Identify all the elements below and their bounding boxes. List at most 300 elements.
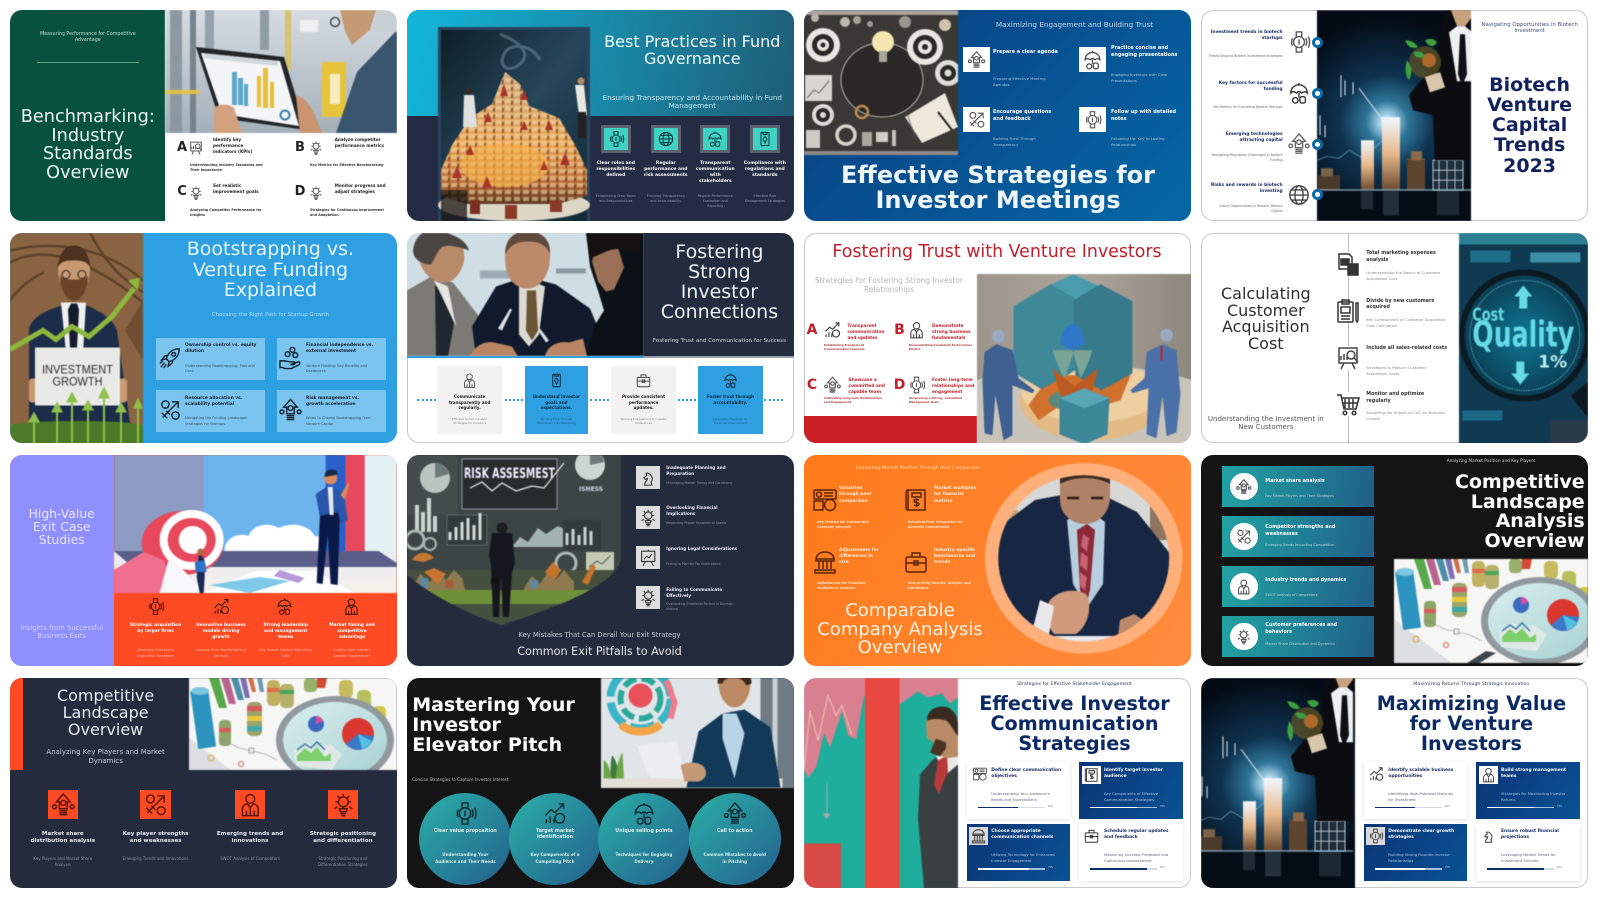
column 1 heading: responsibilities	[596, 167, 635, 172]
card 2	[1476, 762, 1580, 819]
illustration: risk assessment shield: ISHESS	[579, 486, 603, 493]
subtitle: Strategies for Effective Stakeholder Engagement	[1017, 682, 1132, 687]
title: Investor	[681, 281, 758, 303]
icon tile: presentations	[1079, 47, 1106, 72]
subtitle: Business Exits	[37, 632, 86, 640]
title: Bootstrapping vs.	[187, 238, 354, 260]
title: Fostering	[675, 241, 763, 263]
item 2 heading: Divide by new customers	[1366, 299, 1434, 304]
card 3 heading	[1388, 829, 1454, 841]
item 3 heading: Include all sales-related costs	[1366, 346, 1447, 351]
oval 2 heading: Target market	[536, 829, 574, 834]
card 2 description: Transparency and Reporting	[537, 421, 576, 425]
title: Venture Funding	[193, 259, 348, 281]
photo: businessman before market chart	[804, 678, 958, 888]
oval 4 description: Common Mistakes to Avoid	[703, 852, 766, 857]
card 4 description: Leveraging Market Trends for	[1501, 853, 1556, 857]
card 2 description: Communication Strategies	[1104, 798, 1154, 802]
item D heading: Monitor progress and	[335, 183, 386, 188]
subtitle	[815, 276, 963, 294]
column 3 description: Evaluation and	[703, 199, 728, 203]
item 3 description: Multiples in Analysis	[817, 586, 855, 590]
card 2 progress bar	[1487, 807, 1554, 808]
follow up description: Following Up: Key to Lasting	[1111, 136, 1165, 141]
card 3 heading	[622, 394, 665, 411]
column 1 description: Key Players and Market Share	[33, 856, 92, 861]
column 2 heading: and weaknesses	[130, 838, 181, 844]
subtitle: Fostering Trust and Communication for Success	[653, 338, 786, 344]
card: independence	[276, 338, 386, 380]
card 4	[1476, 824, 1580, 881]
item A description: Establishing Transparent	[824, 343, 864, 347]
subtitle: Ensuring Transparency and Accountability in Fund	[603, 92, 782, 102]
card: resources	[156, 390, 265, 432]
card 2	[1222, 516, 1374, 557]
item 2 heading: acquired	[1366, 305, 1390, 310]
column 1 description	[137, 648, 174, 659]
title: Fostering Trust with Venture Investors	[832, 242, 1162, 262]
item D description: Strategies for Continuous Improvement	[310, 208, 384, 212]
independence heading: external investment	[306, 349, 356, 354]
timeline dot 3	[1312, 138, 1322, 150]
item 1 heading: startups	[1262, 36, 1283, 41]
photo: man holding investment growth sign: GROWTH	[52, 376, 102, 388]
subtitle	[20, 624, 103, 640]
questions description	[993, 136, 1036, 147]
ownership heading: Ownership control vs. equity	[185, 343, 256, 348]
item 1 description: Trends Shaping Biotech Investment Strategies	[1209, 54, 1283, 58]
item 4 description	[1219, 204, 1283, 214]
item C heading	[213, 183, 259, 194]
card 1 heading: Communicate	[454, 394, 485, 399]
oval 1 description: Understanding Your	[442, 852, 488, 857]
card 1 description: Understanding Your Audience's	[991, 792, 1050, 796]
panel: Bootstrapping slide	[10, 232, 397, 443]
panel: Investor Communication slide	[804, 678, 1191, 888]
card 1 percent: 60%	[1048, 804, 1053, 808]
item 4 heading	[666, 587, 722, 599]
dotted connector 4	[678, 399, 696, 401]
photo: three men in discussion	[407, 232, 644, 356]
column 3 heading: and management	[264, 629, 307, 634]
card 1 heading	[1388, 768, 1453, 780]
item 1 heading	[1366, 251, 1436, 265]
card 3 percent: 75%	[1445, 866, 1450, 869]
photo: man holding investment growth sign	[10, 232, 143, 444]
letter D: D	[894, 377, 905, 393]
subtitle: Measuring Performance for Competitive	[40, 32, 136, 37]
icon: watch	[1290, 31, 1310, 53]
card 1 description: Key Market Players and Their Strategies	[1265, 494, 1334, 498]
item 1 heading: Investment trends in biotech	[1211, 30, 1283, 35]
column 3 description	[259, 648, 312, 659]
photo: magnifier over cost and quality: 1%	[1538, 352, 1567, 372]
dotted connector 5	[764, 399, 783, 401]
subtitle: Concise Strategies to Capture Investor Interest	[412, 777, 508, 782]
title: Elevator Pitch	[412, 734, 562, 756]
title	[29, 507, 95, 547]
column 1 description: Establishing Clear Roles	[596, 194, 636, 198]
icon tile 1	[48, 790, 78, 819]
panel: Exit Pitfalls slide	[407, 455, 794, 666]
card 2 description	[1104, 791, 1158, 803]
oval 4 heading: Call to action	[717, 829, 753, 834]
item 3 description	[1211, 152, 1283, 162]
item 3 description: Strategies to Reduce Customer	[1366, 365, 1426, 370]
panel: Competitive Landscape Analysis slide	[1201, 455, 1588, 666]
title: Company Analysis	[817, 619, 983, 640]
item 3 heading: attracting capital	[1240, 138, 1283, 143]
title: Standards	[43, 144, 133, 164]
item 2 heading	[1366, 299, 1434, 312]
item 4 description	[908, 581, 971, 591]
card 3 description: Relationships	[1388, 859, 1413, 863]
item 2 heading	[934, 486, 976, 505]
card 4 heading	[1265, 622, 1337, 636]
item 4 heading: regularly	[1366, 399, 1391, 404]
follow up heading: notes	[1111, 116, 1127, 122]
column 3 heading	[264, 623, 308, 641]
red base strip	[804, 416, 977, 444]
column 4 heading	[310, 830, 376, 846]
item D description: and Adaptation	[310, 212, 339, 216]
panel: Elevator Pitch slide	[407, 678, 794, 888]
icon tile 4	[636, 586, 660, 609]
icon badge 4	[1230, 623, 1258, 650]
column 3 description: Reporting	[707, 204, 723, 208]
card 1 heading: Market share analysis	[1265, 478, 1325, 484]
title: Strategies	[1018, 732, 1131, 755]
column 2 heading: risk assessments	[644, 173, 688, 178]
item 4 heading: Failing to Communicate	[666, 587, 722, 592]
oval 2 description: Key Components of a	[530, 852, 580, 857]
oval 3 description: Delivery	[634, 859, 653, 864]
card 2 heading: Build strong management	[1501, 768, 1566, 773]
card 4 heading	[1501, 829, 1559, 841]
column 4 description: Strategic Positioning and	[318, 856, 367, 861]
subtitle: Analyzing Key Players and Market	[46, 748, 165, 756]
card 1 heading: regularly.	[459, 405, 481, 410]
item 3 description: Acquisition Costs	[1366, 371, 1399, 376]
column 3 heading: stakeholders	[699, 179, 732, 184]
icon: house arrow	[824, 376, 841, 394]
risk description: When to Choose Bootstrapping Over	[306, 416, 371, 420]
oval 1 description: Audience and Their Needs	[435, 859, 496, 864]
timeline dot 4	[1312, 189, 1322, 200]
title: Competitive	[57, 686, 154, 705]
column 2 description: Emerging Trends and Innovations	[123, 856, 188, 861]
icon tile 1	[636, 466, 660, 489]
presentations heading: engaging presentations	[1111, 52, 1177, 58]
blue accent strip	[407, 356, 644, 358]
item 2 description	[1366, 317, 1446, 329]
photo: man with laptop and marketing wheel	[600, 678, 794, 788]
item 2 heading: Overlooking Financial	[666, 505, 718, 510]
card 3 heading: communication channels	[991, 835, 1053, 840]
item 1 description: Acquisition Cost	[1366, 276, 1397, 281]
presentations description: Engaging Investors with Clear	[1111, 72, 1168, 77]
icon tile: clipboard	[750, 125, 780, 153]
item 4 description	[1366, 410, 1445, 423]
subtitle: Relationships	[864, 284, 914, 294]
card 1 description	[452, 417, 487, 426]
ownership heading	[185, 343, 256, 356]
subtitle: Analyzing Market Position and Key Players	[1447, 458, 1535, 462]
icon: coins and gears	[813, 488, 837, 512]
item C description: Insights	[190, 212, 205, 216]
column 4 description	[745, 194, 785, 203]
title: 2023	[1503, 155, 1556, 177]
title: Trends	[1494, 134, 1565, 156]
item 1 heading	[666, 465, 726, 478]
card 1 description	[991, 791, 1050, 803]
title: Venture	[1487, 94, 1572, 116]
risk heading: Risk management vs.	[306, 396, 359, 401]
subtitle: Investment	[1514, 28, 1545, 34]
item 3 heading	[839, 548, 879, 566]
item C description: Cultivating Long-term Relationships	[824, 396, 882, 400]
item C heading: Set realistic	[213, 183, 241, 188]
column 3 heading	[217, 830, 283, 846]
illustration: target and businessman	[114, 455, 397, 593]
icon: dollar book	[904, 488, 928, 512]
title: Landscape	[63, 703, 149, 722]
card 1	[1222, 466, 1374, 507]
item 3 description	[817, 581, 866, 591]
column 2 description: Lessons from Top-Performing	[196, 648, 246, 652]
column 4 description: Differentiation Strategies	[318, 862, 368, 867]
card: ownership	[156, 338, 265, 380]
card 1 progress bar	[1375, 807, 1442, 808]
item D description	[909, 397, 962, 405]
icon: watch	[908, 376, 925, 394]
card 2	[1079, 762, 1183, 819]
column 2 description: Ensuring Transparency	[647, 194, 685, 198]
subtitle: Advantage	[75, 38, 101, 43]
oval 3 description: Techniques for Engaging	[615, 852, 672, 857]
item 4 heading: Industry-specific	[934, 548, 975, 552]
resources heading: Resource allocation vs.	[185, 396, 242, 401]
title: Governance	[644, 49, 741, 68]
title	[1455, 473, 1585, 552]
icon tile: follow up	[1079, 107, 1106, 132]
title	[841, 161, 1155, 214]
risk heading	[306, 396, 359, 408]
column 2 heading	[644, 160, 688, 178]
card 4 heading	[1104, 829, 1168, 841]
column 3 description	[698, 194, 733, 208]
item D heading: relationships and	[932, 384, 974, 389]
item A letter: A	[177, 140, 187, 155]
icon: shopping cart	[1336, 392, 1360, 416]
item 2 heading	[1219, 80, 1283, 92]
column 2 description: Startups	[214, 654, 228, 658]
title: Comparable	[845, 600, 955, 621]
item B description	[909, 344, 972, 351]
card 4	[698, 366, 763, 434]
icon: coins and gears	[973, 766, 987, 782]
card 1 heading: transparently and	[449, 400, 490, 404]
card 4 description	[1104, 852, 1168, 864]
questions heading: Encourage questions	[993, 109, 1051, 115]
column 4 heading	[329, 623, 375, 641]
column 4 heading: and differentiation	[313, 838, 373, 844]
column 4 description: Effective Risk	[753, 194, 776, 198]
photo: man holding investment growth sign: INVESTMENT	[42, 364, 113, 376]
icon: hand with coins	[279, 345, 302, 371]
icon tile: person	[1479, 766, 1498, 784]
oval 3 heading: Unique selling points	[615, 829, 673, 834]
vertical timeline line	[1348, 232, 1349, 444]
column 1 heading: distribution analysis	[30, 838, 95, 844]
item D letter: D	[295, 184, 305, 199]
card 1 description: Needs and Expectations	[991, 798, 1037, 802]
item 4 heading: trends	[934, 560, 950, 565]
panel: Benchmarking slide	[10, 10, 397, 220]
column 4 heading: standards	[752, 173, 778, 178]
card 2 percent: 70%	[1160, 804, 1165, 808]
ownership description	[185, 364, 255, 374]
section heading: Maximizing Engagement and Building Trust	[996, 20, 1153, 29]
oval 4 description	[703, 852, 766, 865]
oval 3 description	[615, 852, 672, 865]
icon: umbrella	[275, 598, 294, 615]
item 1 description	[1366, 270, 1440, 282]
title: Investor	[412, 714, 501, 736]
item A heading: and updates	[847, 336, 878, 341]
item C description	[824, 397, 882, 405]
icon: watch	[453, 802, 477, 825]
card 2 heading: weaknesses	[1265, 532, 1298, 536]
item 1 description	[817, 520, 869, 530]
card 2 description: Key Components of Effective	[1104, 792, 1158, 796]
dotted connector 1	[417, 399, 436, 401]
item D description: Showcasing a Strong, Committed	[909, 396, 962, 400]
card 4 description: Measuring Success: Feedback and	[1104, 853, 1168, 857]
follow up heading: Follow up with detailed	[1111, 109, 1176, 115]
column 2 heading: Regular	[656, 161, 676, 166]
photo: magnifier over cost and quality	[1459, 232, 1588, 444]
card 2 description: Returns	[1501, 798, 1515, 802]
card 2	[524, 366, 588, 434]
photo: charts under magnifying glass	[189, 678, 397, 770]
card 4 progress bar	[1487, 868, 1554, 870]
column 2 heading: growth	[212, 635, 230, 640]
item A description	[190, 163, 263, 172]
letter C: C	[807, 377, 817, 393]
item 1 heading	[1211, 30, 1283, 41]
item 3 heading: differences in	[839, 554, 873, 559]
oval 1 heading: Clear value proposition	[434, 829, 497, 834]
icon: clipboard	[549, 372, 564, 389]
item 2 description: Key Components of Customer Acquisition	[1366, 317, 1446, 322]
item A heading: Transparent	[847, 324, 877, 329]
column 4 heading: Market timing and	[329, 623, 375, 628]
item A heading	[213, 137, 252, 154]
item 1 heading	[839, 486, 872, 505]
ownership heading: dilution	[185, 349, 204, 354]
dotted connector 2	[504, 399, 522, 401]
card 2 progress bar	[1090, 807, 1157, 808]
card 3 description: Building Strong Founder-Investor	[1388, 853, 1450, 857]
title: Overview	[1485, 530, 1585, 552]
column 1 heading	[130, 623, 181, 635]
card 3 heading: Choose appropriate	[991, 829, 1041, 834]
item A heading: communication	[847, 330, 884, 335]
card 3 description	[1388, 852, 1450, 864]
card 4 heading: accountability.	[713, 400, 747, 404]
item C heading	[848, 378, 885, 396]
item 4 heading: benchmarks and	[934, 554, 975, 559]
title	[661, 242, 778, 322]
card 3 heading: strategies	[1388, 835, 1414, 840]
subtitle: Management	[669, 101, 716, 110]
card 2 description: Emerging Trends Impacting Competition	[1265, 543, 1334, 547]
column 4 heading: regulations and	[745, 167, 785, 172]
subtitle: Insights from Successful	[20, 624, 103, 632]
navy title panel	[644, 232, 794, 356]
title	[21, 107, 155, 182]
card 1 heading	[449, 394, 490, 411]
oval 4 description: in Pitching	[722, 859, 747, 864]
column 2 description	[647, 194, 685, 203]
icon: briefcase	[1084, 828, 1099, 844]
title	[187, 239, 354, 301]
illustration: risk assessment shield: RISK ASSESMEST	[464, 466, 555, 482]
item 1 heading: through peer	[839, 492, 872, 497]
item C heading: improvement goals	[213, 189, 259, 194]
icon tile: watch	[1366, 827, 1385, 845]
item C description: and Engagement	[824, 400, 851, 404]
card 4	[1079, 824, 1183, 881]
green title panel	[10, 10, 165, 221]
card 1 progress bar	[978, 807, 1045, 808]
icon tile: questions	[963, 107, 990, 132]
title: Common Exit Pitfalls to Avoid	[517, 645, 682, 658]
card 2 heading: goals and	[545, 400, 568, 404]
resources heading	[185, 396, 242, 408]
icon tile: globe	[651, 125, 681, 153]
oval 2	[509, 793, 601, 885]
oval 2 description	[530, 852, 580, 865]
card 4 description	[713, 417, 748, 426]
column 3 description: Exits	[282, 654, 290, 658]
photo: figures around 3D blocks	[976, 274, 1192, 444]
card 2 heading	[1265, 524, 1335, 538]
photo: tablet with charts	[164, 10, 397, 134]
icon badge 1	[1230, 473, 1258, 500]
item D heading: Foster long-term	[932, 378, 973, 383]
card 2 heading	[533, 394, 580, 411]
icon: clipboard and pen	[1336, 299, 1360, 323]
card 2 heading	[1104, 768, 1163, 780]
card 1 heading: Define clear communication	[991, 768, 1061, 773]
column 4 description: Insights from Industry	[333, 648, 371, 652]
card 2 heading	[1501, 768, 1566, 780]
title: Mastering Your	[412, 694, 575, 716]
item A heading: Identify key	[213, 137, 241, 142]
subtitle: Evaluating Market Position Through Peer Comparison	[856, 466, 980, 471]
card 2 heading: audience	[1104, 774, 1127, 779]
icon: growth chart	[1369, 766, 1384, 782]
agenda description: Agendas	[993, 82, 1009, 87]
card 1 description: Strategies for Investors	[453, 421, 486, 425]
icon: chart board	[190, 142, 202, 155]
oval 1 description	[435, 852, 496, 865]
follow up heading	[1111, 109, 1176, 122]
item 2 heading: funding	[1264, 87, 1283, 92]
oval photo: businessman at desk	[984, 462, 1183, 654]
